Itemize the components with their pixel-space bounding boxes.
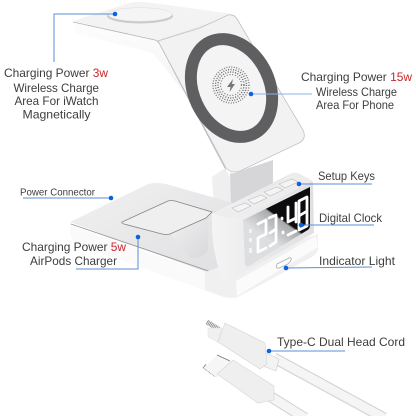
callout: AirPods charger: AirPods Charger xyxy=(30,254,117,268)
clock body xyxy=(212,173,314,280)
callout: digital clock xyxy=(299,211,383,227)
label: charging power 15w: Charging Power 15w xyxy=(301,70,412,84)
callout: setup keys xyxy=(297,169,375,186)
callout: power connector: Power Connector xyxy=(20,188,96,198)
callout: setup keys: Setup Keys xyxy=(318,169,375,183)
phone panel xyxy=(158,15,304,172)
callout: digital clock: Digital Clock xyxy=(319,211,383,225)
arm front face xyxy=(73,22,190,100)
callout: indicator light: Indicator Light xyxy=(319,254,396,268)
AirPods charging pad xyxy=(170,216,208,258)
digital clock screen xyxy=(243,187,310,267)
icon: lightning bolt xyxy=(227,79,235,92)
cable: upper Type-C xyxy=(207,322,384,416)
watch charger puck xyxy=(107,8,173,24)
callout: phone charging: Area For Phone xyxy=(316,98,394,112)
setup keys xyxy=(232,179,298,212)
callout: AirPods charger: Charging Power 5w xyxy=(22,240,126,254)
stand arm and phone charging panel xyxy=(73,2,304,172)
clock top xyxy=(213,173,313,218)
callout: watch charging xyxy=(4,12,117,122)
support stem xyxy=(212,160,273,206)
plinth xyxy=(205,234,318,298)
label: watch description: Magnetically xyxy=(22,108,90,122)
callout: indicator light xyxy=(284,254,396,270)
arm top surface xyxy=(73,2,240,41)
callout: Type-C cord: Type-C Dual Head Cord xyxy=(277,335,405,349)
cable: lower Type-C xyxy=(204,355,305,416)
clock unit xyxy=(205,173,318,298)
charging speaker dots xyxy=(213,67,249,103)
label: phone description: Wireless Charge xyxy=(316,85,397,99)
callout: phone charging xyxy=(249,70,412,112)
label: watch description: Area For iWatch xyxy=(14,94,98,108)
label: charging power 3w: Charging Power 3w xyxy=(4,66,108,80)
label: watch description: Wireless Charge xyxy=(14,81,99,95)
clock digits xyxy=(258,197,307,252)
magnetic ring xyxy=(176,26,287,150)
callout: AirPods charger xyxy=(22,235,140,269)
label: watch description xyxy=(14,81,99,122)
indicator light xyxy=(276,258,291,268)
base plate xyxy=(70,183,240,298)
